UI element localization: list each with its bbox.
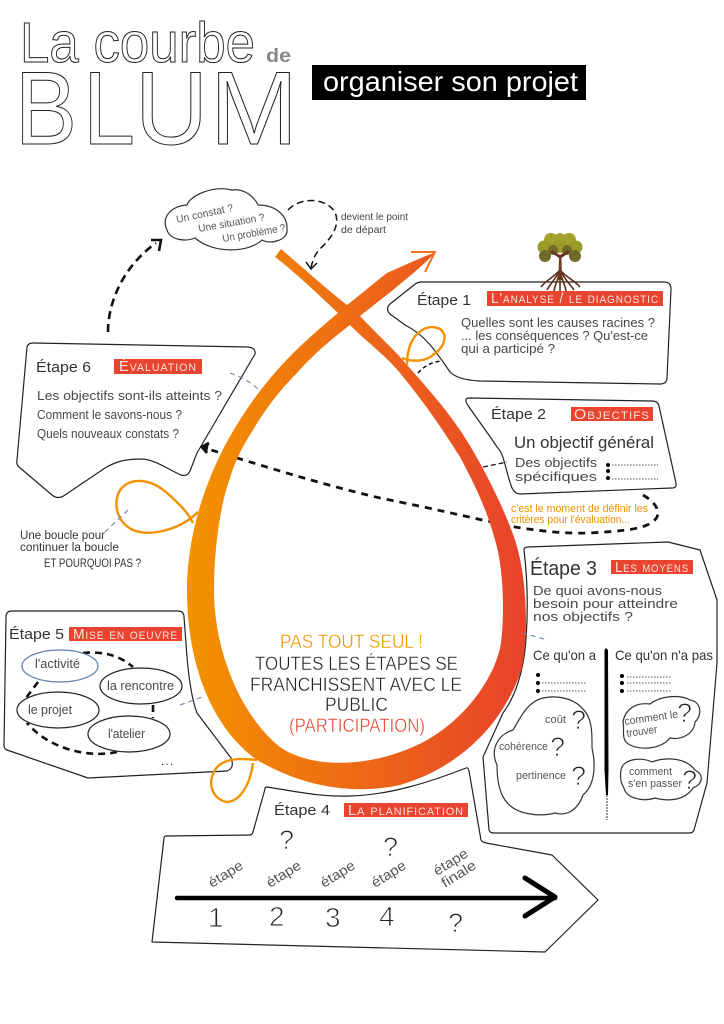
cloud: coût cohérence pertinence: pertinence (516, 770, 566, 782)
timeline stage labels: étape (368, 857, 409, 891)
bubble: la rencontre: la rencontre (107, 678, 174, 693)
text: question étape 3: nos objectifs ? (533, 609, 633, 624)
bubble: l'activité: l'activité (35, 656, 80, 671)
text: objectifs spécifiques: Des objectifs (515, 455, 598, 470)
arrow: dashed évaluation criteria (202, 443, 658, 533)
label: objectifs: Objectifs (574, 406, 650, 423)
divider: brush stroke (604, 648, 608, 820)
text: questions étape 1: qui a participé ? (461, 341, 555, 356)
title: M (210, 51, 298, 167)
label: évaluation: Évaluation (119, 358, 197, 375)
curve: blum orange drop (187, 249, 526, 789)
question marks above timeline: ? (383, 832, 398, 862)
central message: TOUTES LES ÉTAPES SE (255, 654, 458, 675)
text: objectifs spécifiques (515, 455, 658, 484)
link: étape 1 dashed (418, 361, 441, 373)
cloud: comment le trouver: ? (677, 698, 692, 728)
loop: étape 1 (402, 327, 444, 365)
panel: étape 6 évaluation (17, 343, 255, 498)
cloud: coût cohérence pertinence: ? (550, 732, 565, 762)
cloud: comment s'en passer (620, 759, 701, 800)
text: questions étape 6: Quels nouveaux constats ? (37, 426, 179, 441)
text: objectif général: Un objectif général (514, 433, 654, 452)
text: une boucle pour continuer: continuer la boucle (20, 542, 119, 554)
loop: boucle étape 6 (116, 481, 198, 533)
cloud: comment le trouver: trouver (626, 724, 658, 740)
bullet list: left (536, 673, 587, 693)
cloud: coût cohérence pertinence: cohérence (499, 741, 548, 753)
timeline numbers: 3 (325, 902, 341, 933)
cloud: starting point: Un problème ? (221, 222, 287, 245)
timeline stage labels: finale (438, 857, 479, 891)
text: questions étape 6: Les objectifs sont-ils atteints ? (37, 388, 222, 403)
label: les moyens: Les moyens (615, 559, 689, 576)
cloud: coût cohérence pertinence: ? (571, 761, 586, 791)
arrow: étape 6 to cloud (108, 240, 161, 332)
bubble: le projet (17, 692, 99, 728)
timeline stage labels: étape (205, 857, 246, 891)
cloud: comment le trouver (623, 697, 700, 748)
heading: étape 6: Étape 6 (36, 359, 91, 376)
timeline numbers: 1 (208, 902, 224, 933)
cloud: coût cohérence pertinence: coût (545, 714, 566, 726)
text: critères évaluation: c'est le moment de définir les (511, 503, 648, 515)
title: B (15, 51, 77, 167)
central message: PUBLIC (325, 695, 388, 716)
central message: (PARTICIPATION) (289, 716, 425, 737)
cloud: comment le trouver: comment le (624, 709, 679, 728)
bubble: le projet: le projet (28, 702, 72, 717)
text: question étape 3: besoin pour atteindre (533, 596, 678, 611)
timeline stage labels (205, 845, 479, 891)
text: une boucle pour continuer: ET POURQUOI PAS ? (44, 558, 141, 570)
dashed cycle links (26, 653, 153, 754)
heading: étape 3: Étape 3 (530, 557, 597, 580)
bubble: l'atelier (88, 716, 170, 752)
label: analyse diagnostic: L'analyse / le diagnostic (491, 290, 659, 307)
text: une boucle pour continuer (20, 530, 141, 570)
central message: FRANCHISSENT AVEC LE (250, 675, 462, 696)
text: devient le point de départ: devient le point (341, 211, 408, 223)
arrow: timeline (177, 878, 555, 916)
central message: PAS TOUT SEUL ! (280, 632, 423, 653)
timeline stage labels: étape (317, 857, 358, 891)
cloud: coût cohérence pertinence (494, 697, 594, 815)
text: questions étape 1: ... les conséquences ? Qu'est-ce (461, 328, 648, 343)
timeline numbers: 2 (269, 901, 285, 932)
bullet list: right (620, 674, 672, 693)
loop: étape 5 (211, 759, 257, 802)
link: étape 2 dashed (483, 462, 507, 467)
text: objectifs spécifiques: spécifiques (515, 469, 598, 484)
panel: étape 5 mise en oeuvre (4, 611, 232, 778)
cloud: coût cohérence pertinence: ? (571, 705, 586, 735)
timeline numbers: ? (448, 908, 463, 938)
subtitle banner: organiser son projet (323, 66, 578, 97)
ellipsis: ... (161, 756, 173, 768)
connectors: blue dashes (105, 373, 548, 705)
question marks above timeline (279, 825, 398, 862)
text: une boucle pour continuer: Une boucle pour (20, 530, 105, 542)
icon: tree with roots (538, 233, 582, 291)
text: question étape 3: De quoi avons-nous (533, 583, 663, 598)
cloud: starting point: Un constat ? (175, 202, 235, 226)
text: questions étape 1: Quelles sont les causes racines ? (461, 315, 655, 330)
bubble: l'atelier: l'atelier (108, 726, 146, 741)
cloud: starting point (165, 189, 287, 250)
panel: étape 1 analyse (388, 282, 671, 384)
heading: étape 5: Étape 5 (9, 626, 64, 643)
heading: étape 2: Étape 2 (491, 406, 546, 423)
arrow head: curve end (411, 252, 435, 272)
title (15, 11, 298, 167)
panel: étape 3 moyens (483, 542, 717, 833)
heading: étape 1: Étape 1 (417, 292, 471, 309)
cloud: comment s'en passer: comment (629, 766, 672, 778)
title: de (266, 46, 291, 67)
text: critères évaluation (511, 503, 648, 526)
text: devient le point de départ (341, 211, 408, 236)
heading: étape 4: Étape 4 (274, 802, 330, 819)
text: questions étape 1 (461, 315, 655, 356)
text: critères évaluation: critères pour l'évaluation... (511, 514, 630, 526)
column heading: ce qu'on a: Ce qu'on a (533, 647, 596, 663)
bubble: l'activité (22, 650, 98, 682)
panel: étape 2 objectifs (466, 398, 676, 494)
label: la planification: La planification (348, 802, 464, 819)
question marks above timeline: ? (279, 825, 294, 855)
title: U (135, 51, 208, 167)
timeline numbers (208, 901, 463, 938)
text: question étape 3 (533, 583, 678, 624)
central message (250, 632, 462, 737)
text: questions étape 6 (37, 388, 222, 441)
text: devient le point de départ: de départ (341, 224, 386, 236)
bubble: la rencontre (100, 668, 182, 704)
panel: étape 4 planification (152, 768, 598, 952)
cloud: comment s'en passer: s'en passer (628, 778, 682, 790)
column heading: ce qu'on n'a pas: Ce qu'on n'a pas (615, 647, 713, 663)
text: questions étape 6: Comment le savons-nous ? (37, 407, 182, 422)
cloud: starting point: Une situation ? (197, 211, 266, 235)
arrow: dashed cloud to start (288, 200, 337, 269)
cloud: comment s'en passer: ? (682, 765, 697, 795)
timeline stage labels: étape (430, 845, 471, 879)
title: L (83, 51, 135, 167)
timeline stage labels: étape (263, 857, 304, 891)
label: mise en oeuvre: Mise en oeuvre (73, 626, 178, 643)
title: La courbe (20, 11, 255, 75)
timeline numbers: 4 (379, 901, 395, 932)
